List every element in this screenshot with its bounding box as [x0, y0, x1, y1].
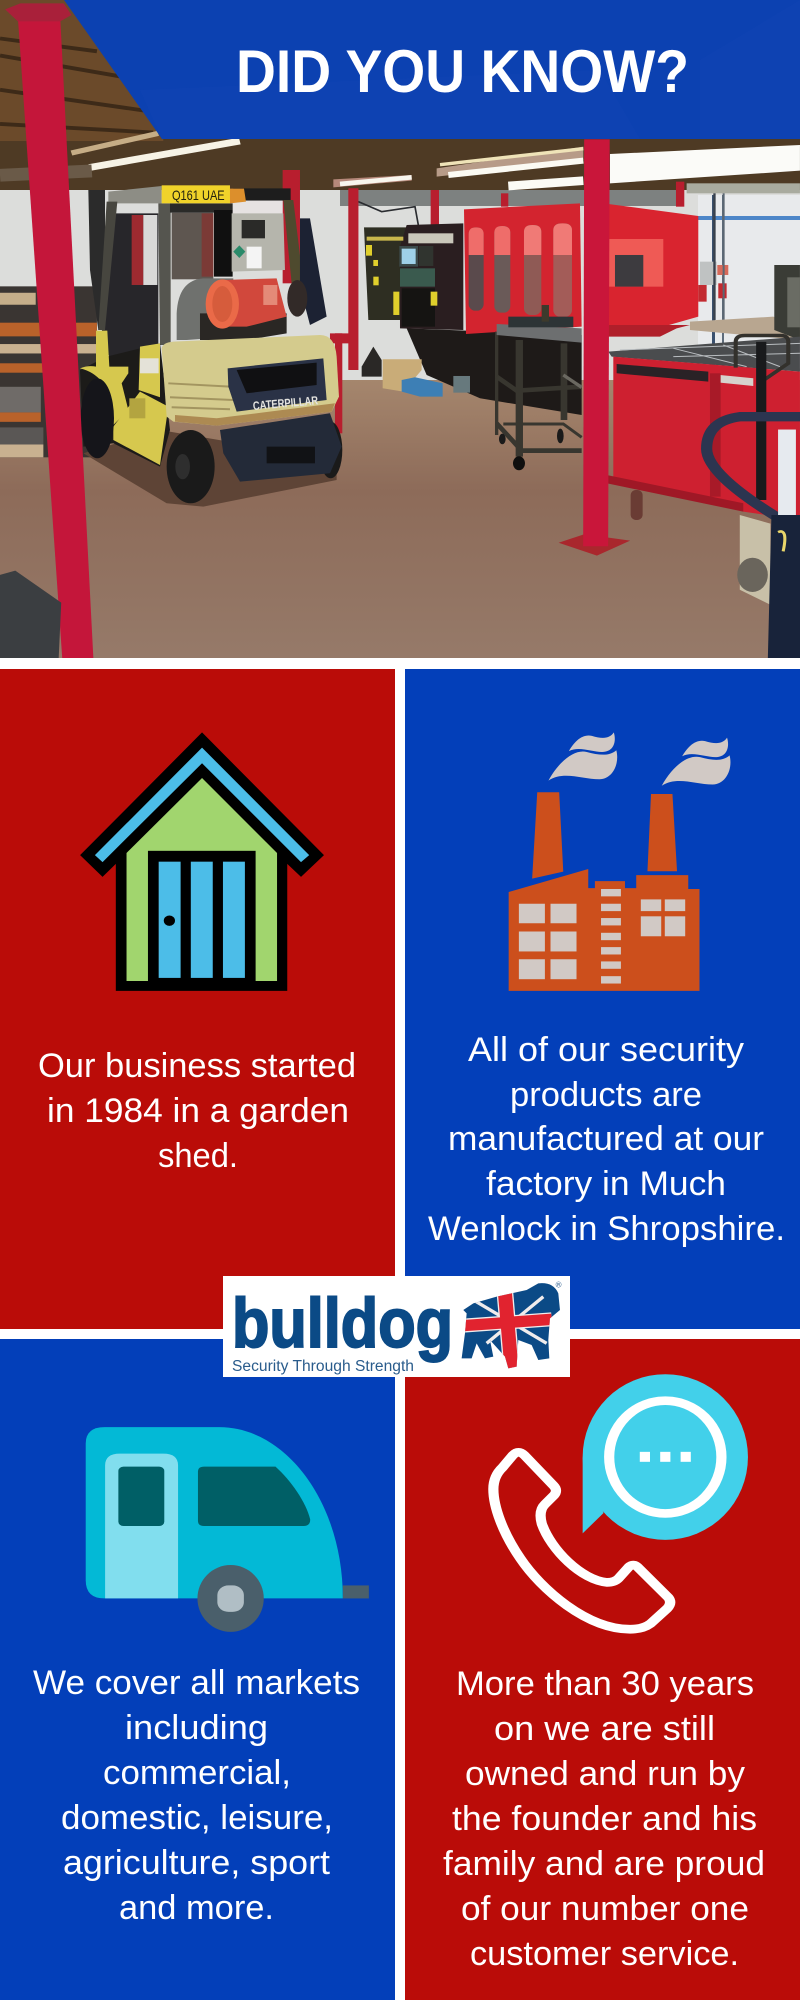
text: factory: manufactured at our [448, 1120, 764, 1158]
mast and roll cage [88, 186, 303, 345]
material shelves [0, 286, 97, 457]
text: factory: All of our security [468, 1031, 744, 1069]
text: family owned: customer service. [470, 1935, 739, 1973]
weathered lines [168, 383, 233, 409]
photo: factory floor [0, 0, 800, 658]
pallet truck post [737, 430, 800, 658]
icon: shed [80, 732, 324, 991]
control console [364, 223, 463, 330]
machinery area [333, 145, 800, 520]
icon: phone and speech bubble [493, 1374, 748, 1629]
panel: family owned [405, 1339, 800, 2000]
back wall [0, 190, 800, 390]
text: family owned: More than 30 years [456, 1665, 754, 1703]
red laser cutter right [608, 204, 698, 337]
right red pillar [559, 139, 630, 556]
text: shed: shed. [158, 1137, 238, 1175]
text: caravan: and more. [119, 1889, 274, 1927]
text: caravan [33, 1664, 360, 1927]
jacket [300, 218, 327, 325]
bulldog mark [462, 1280, 562, 1370]
text: family owned: on we are still [494, 1710, 715, 1748]
floor [0, 380, 800, 658]
rear panel [232, 201, 285, 272]
forklift [80, 170, 358, 507]
gas bottle [206, 278, 307, 329]
text: family owned: family and are proud [443, 1845, 765, 1883]
text: shed: Our business started [38, 1047, 356, 1085]
text: caravan: domestic, leisure, [61, 1799, 333, 1837]
text: factory: Wenlock in Shropshire. [428, 1210, 785, 1248]
text: family owned: owned and run by [465, 1755, 745, 1793]
rear wheel [167, 430, 215, 503]
floor shadow [83, 430, 337, 507]
text: factory: products are [510, 1076, 702, 1114]
engine dark block [200, 313, 287, 340]
bumper recess [267, 447, 315, 463]
red pallet table [607, 337, 800, 520]
machine base [407, 328, 582, 415]
fender and side panels [80, 331, 168, 465]
front wheel [81, 378, 114, 458]
title: DID YOU KNOW? [236, 38, 689, 105]
ceiling [0, 139, 800, 190]
panel: garden shed [0, 669, 395, 1329]
cardboard box and toolbox [383, 359, 470, 397]
steel trolley [497, 332, 582, 457]
text: factory [428, 1031, 785, 1248]
number plate: Q161 UAE [172, 187, 225, 203]
lights and beams [333, 145, 800, 193]
rear tyre [324, 422, 342, 478]
text: family owned: of our number one [461, 1890, 749, 1928]
text: caravan: commercial, [103, 1754, 291, 1792]
tagline: Security Through Strength [232, 1358, 414, 1375]
seat and tank [177, 278, 233, 340]
title banner [64, 0, 800, 139]
red laser cutter left [464, 203, 582, 334]
wordmark: bulldog [232, 1284, 453, 1362]
text: caravan: We cover all markets [33, 1664, 360, 1702]
dark cables and wall equipment [358, 193, 728, 377]
pallet truck [0, 3, 800, 658]
brand name: CATERPILLAR [252, 393, 319, 413]
background red pillars [283, 170, 358, 433]
text: shed [38, 1047, 356, 1175]
platform [690, 265, 800, 340]
icon: factory [509, 732, 730, 991]
cream counterweight [162, 335, 339, 426]
bulldog mark: ® [556, 1280, 562, 1289]
icon: caravan [86, 1427, 369, 1632]
text: shed: in 1984 in a garden [47, 1092, 349, 1130]
trolley top [497, 305, 582, 470]
dark chassis under cab [80, 343, 170, 467]
cab interior [102, 212, 214, 356]
grille [228, 358, 327, 412]
text: factory: factory in Much [486, 1165, 726, 1203]
background pillars [349, 182, 684, 370]
ceiling timber [0, 0, 240, 175]
text: caravan: agriculture, sport [63, 1844, 331, 1882]
rust edge [175, 403, 335, 426]
number plate [162, 185, 230, 203]
waste bin [0, 571, 61, 658]
text: family owned [443, 1665, 765, 1973]
panel: caravan [0, 1339, 395, 2000]
left red pillar [5, 3, 93, 658]
logo: bulldog [223, 1276, 570, 1377]
grille recess [237, 363, 317, 393]
counterweight bumper [220, 413, 342, 482]
text: caravan: including [125, 1709, 268, 1747]
beacon [230, 189, 246, 203]
panel: factory [405, 669, 800, 1329]
text: family owned: the founder and his [452, 1800, 757, 1838]
